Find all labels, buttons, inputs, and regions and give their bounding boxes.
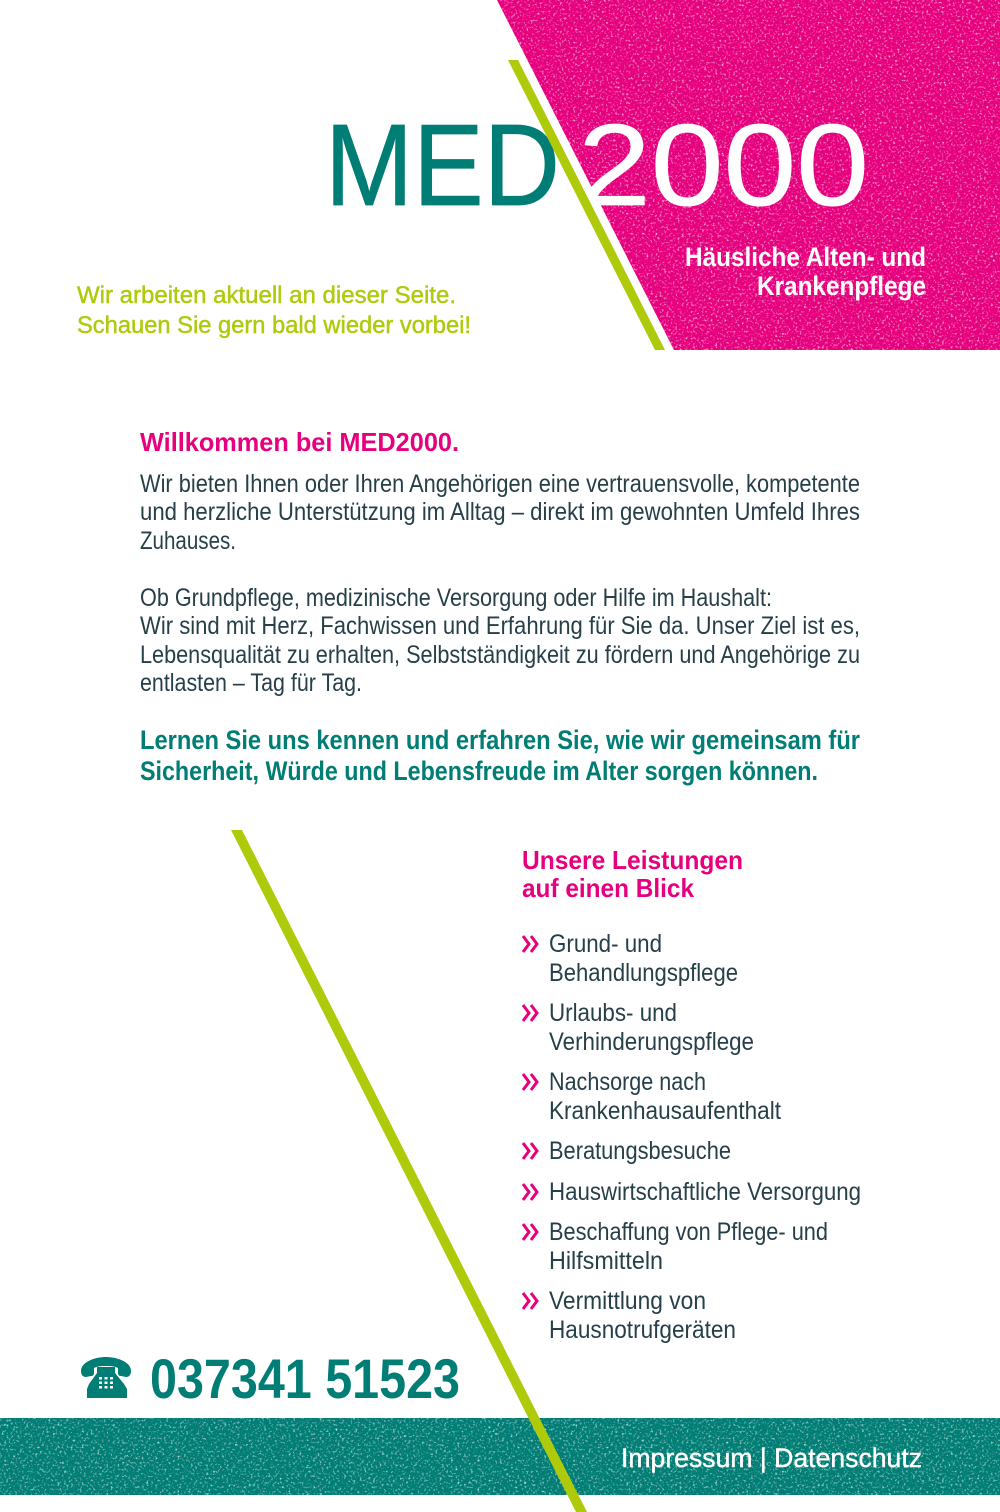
- list item: Beschaffung von Pflege- und Hilfsmitteln: [523, 1218, 828, 1275]
- header tagline: Krankenpflege: [757, 271, 926, 301]
- text block: teal call to action: [140, 725, 860, 786]
- text block: introduction: Zuhauses.: [140, 527, 236, 555]
- footer band: teal textured bar: [0, 1418, 1000, 1495]
- list item: Nachsorge nach Krankenhausaufenthalt: [523, 1068, 781, 1125]
- heading: welcome: Willkommen bei MED2000.: [140, 427, 459, 457]
- text block: teal call to action: Lernen Sie uns kennen und erfahren Sie, wie wir gemeinsam für: [140, 725, 860, 755]
- heading: services: [522, 845, 743, 903]
- list item: Vermittlung von Hausnotrufgeräten: Vermittlung von: [549, 1287, 706, 1315]
- list item: Urlaubs- und Verhinderungspflege: [523, 999, 754, 1056]
- notice: page under construction: Schauen Sie gern bald wieder vorbei!: [77, 312, 471, 339]
- accent stripe: lower lime diagonal: [231, 830, 587, 1512]
- text block: introduction: Wir bieten Ihnen oder Ihren Angehörigen eine vertrauensvolle, kompetente: [140, 470, 860, 498]
- list item: Hauswirtschaftliche Versorgung: Hauswirtschaftliche Versorgung: [549, 1178, 861, 1206]
- text block: services summary: Lebensqualität zu erhalten, Selbstständigkeit zu fördern und Angehörige zu: [140, 641, 860, 669]
- header panel: pink textured shape: [497, 0, 1000, 350]
- logo wordmark MED2000: [325, 100, 869, 230]
- logo wordmark MED2000: MED: [325, 100, 560, 230]
- text block: services summary: entlasten – Tag für Tag.: [140, 669, 362, 697]
- list item: Beschaffung von Pflege- und Hilfsmitteln: Beschaffung von Pflege- und: [549, 1218, 828, 1246]
- list item: Grund- und Behandlungspflege: Behandlungspflege: [549, 959, 738, 987]
- services list: [523, 930, 861, 1344]
- icon: telephone: [81, 1357, 131, 1398]
- text block: services summary: Ob Grundpflege, medizinische Versorgung oder Hilfe im Haushalt:: [140, 584, 772, 612]
- text block: teal call to action: Sicherheit, Würde und Lebensfreude im Alter sorgen können.: [140, 756, 818, 786]
- notice: page under construction: [77, 282, 471, 339]
- text block: introduction: [140, 470, 860, 555]
- heading: services: Unsere Leistungen: [522, 845, 743, 875]
- list item: Beratungsbesuche: Beratungsbesuche: [549, 1137, 731, 1165]
- list item: Nachsorge nach Krankenhausaufenthalt: Krankenhausaufenthalt: [549, 1097, 781, 1125]
- list item: Nachsorge nach Krankenhausaufenthalt: Nachsorge nach: [549, 1068, 706, 1096]
- list item: Urlaubs- und Verhinderungspflege: Urlaubs- und: [549, 999, 677, 1027]
- text block: services summary: [140, 584, 860, 697]
- list item: Urlaubs- und Verhinderungspflege: Verhinderungspflege: [549, 1028, 754, 1056]
- list item: Beschaffung von Pflege- und Hilfsmitteln: Hilfsmitteln: [549, 1247, 663, 1275]
- list item: Vermittlung von Hausnotrufgeräten: Hausnotrufgeräten: [549, 1316, 736, 1344]
- heading: services: auf einen Blick: [522, 873, 695, 903]
- footer links: Impressum | Datenschutz: [621, 1443, 922, 1473]
- header tagline: [685, 242, 926, 301]
- logo wordmark MED2000: 2000: [578, 100, 869, 230]
- header tagline: Häusliche Alten- und: [685, 242, 926, 272]
- text block: services summary: Wir sind mit Herz, Fachwissen und Erfahrung für Sie da. Unser Ziel ist es,: [140, 612, 860, 640]
- list item: Grund- und Behandlungspflege: Grund- und: [549, 930, 662, 958]
- list item: Grund- und Behandlungspflege: [523, 930, 738, 987]
- phone number: 037341 51523: [150, 1347, 460, 1410]
- accent stripe: header lime diagonal: [508, 60, 665, 350]
- text block: introduction: und herzliche Unterstützung im Alltag – direkt im gewohnten Umfeld Ihres: [140, 498, 860, 526]
- list item: Vermittlung von Hausnotrufgeräten: [523, 1287, 736, 1344]
- notice: page under construction: Wir arbeiten aktuell an dieser Seite.: [77, 282, 456, 309]
